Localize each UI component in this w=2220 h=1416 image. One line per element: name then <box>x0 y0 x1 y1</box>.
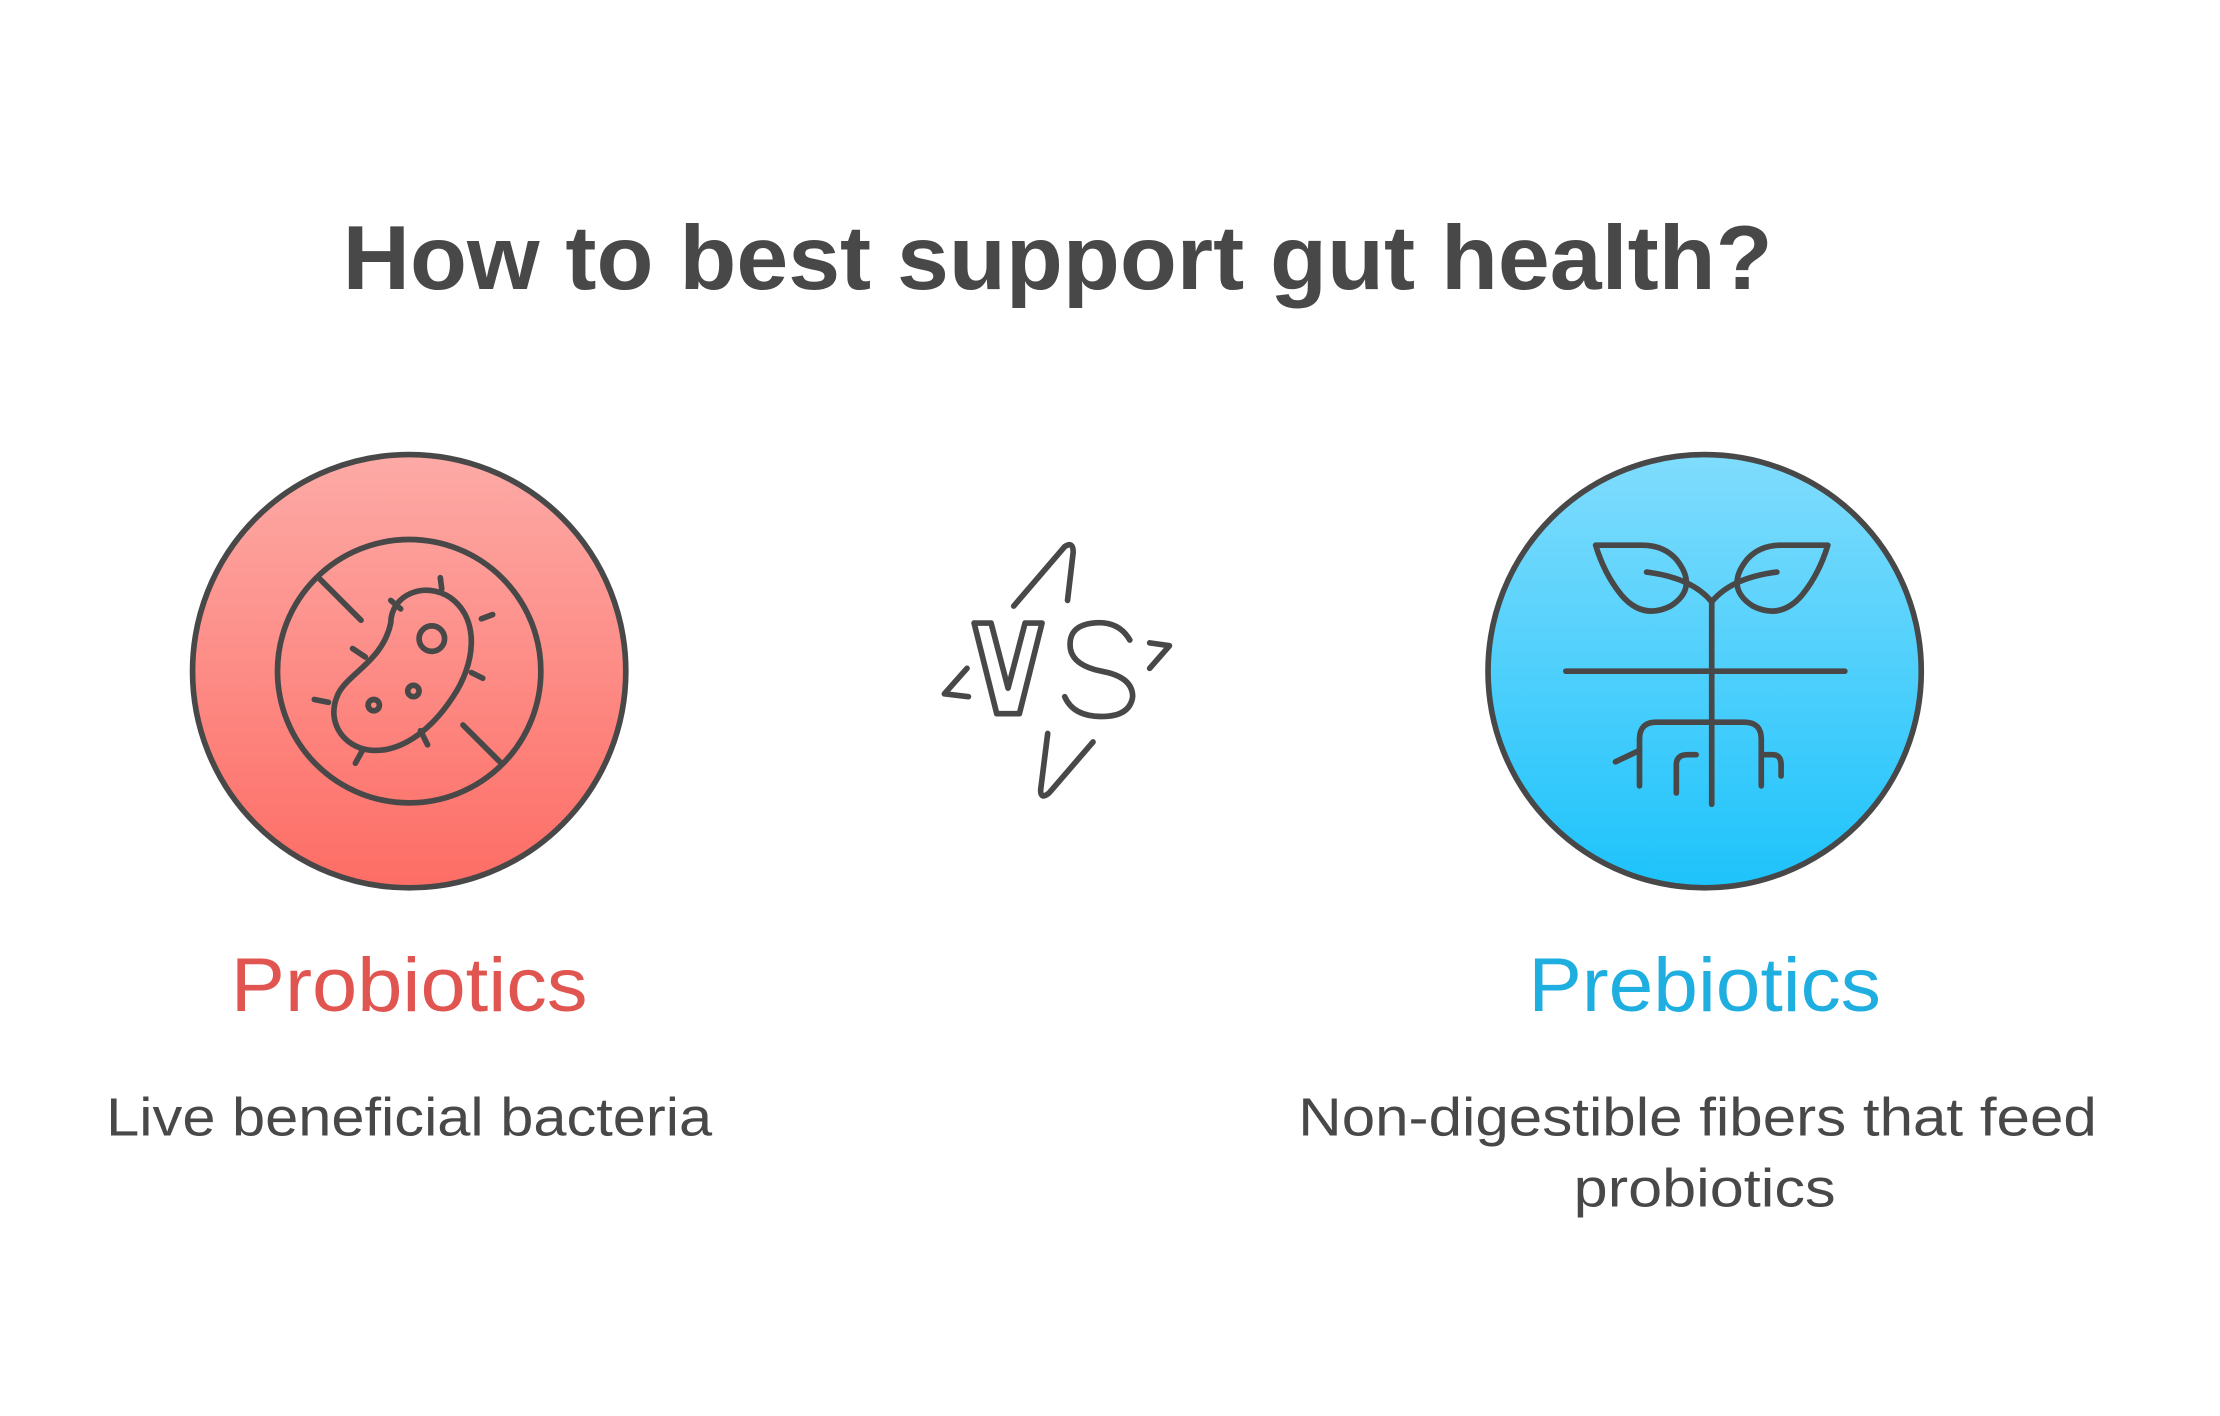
text: prebiotics description: probiotics <box>1574 1158 1836 1218</box>
panel: probiotics <box>106 455 712 1148</box>
icon: probiotics circle <box>193 455 626 888</box>
text: probiotics description: Live beneficial bacteria <box>106 1088 712 1148</box>
icon: vs <box>944 545 1169 796</box>
text: prebiotics description: Non-digestible fibers that feed <box>1298 1088 2097 1148</box>
panel: prebiotics <box>1298 455 2097 1218</box>
heading: probiotics: Probiotics <box>231 943 588 1028</box>
icon: prebiotics circle <box>1488 455 1921 888</box>
title: How to best support gut health? <box>343 208 1773 309</box>
heading: prebiotics: Prebiotics <box>1528 943 1881 1028</box>
